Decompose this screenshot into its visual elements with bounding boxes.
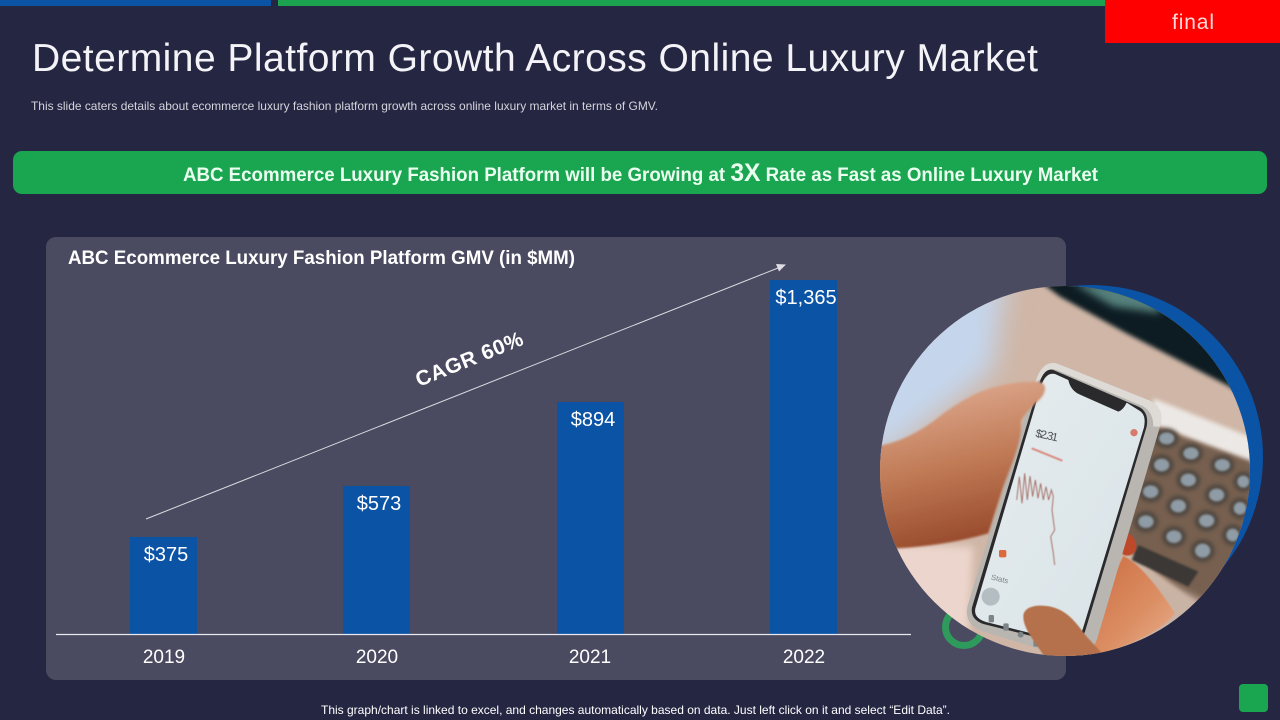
axis label: 2021: 2021 bbox=[569, 647, 611, 668]
tag: final bbox=[1105, 0, 1280, 43]
title: Determine Platform Growth Across Online Luxury Market bbox=[32, 37, 1038, 80]
right hand bbox=[1080, 534, 1175, 656]
phone screen bbox=[975, 374, 1145, 641]
label: CAGR: CAGR 60% bbox=[412, 327, 527, 392]
phone avatar bbox=[982, 588, 1000, 606]
banner bbox=[13, 151, 1267, 194]
phone bbox=[967, 363, 1161, 659]
phone chart marker bbox=[999, 550, 1006, 557]
banner text: ABC Ecommerce Luxury Fashion Platform will be Growing at 3X Rate as Fast as Online Luxury Market bbox=[183, 159, 1099, 187]
bar: 2020 bbox=[343, 486, 410, 634]
phone stats: Stats bbox=[990, 573, 1009, 586]
bar: 2019 bbox=[130, 537, 197, 634]
phone change bbox=[1032, 448, 1062, 461]
phone nav icons bbox=[989, 615, 1039, 647]
bar: 2022 bbox=[770, 280, 837, 634]
footnote: This graph/chart is linked to excel, and changes automatically based on data. Just left click on it and select “Edit Data”. bbox=[321, 703, 950, 717]
blue circle behind photo bbox=[919, 285, 1263, 629]
keyboard keys bbox=[1138, 432, 1249, 558]
chart heading: ABC Ecommerce Luxury Fashion Platform GMV (in $MM) bbox=[68, 248, 575, 269]
axis label: 2020: 2020 bbox=[356, 647, 398, 668]
bar: 2021 bbox=[557, 402, 624, 634]
subtitle: This slide caters details about ecommerce luxury fashion platform growth across online luxury market in terms of GMV. bbox=[31, 99, 658, 113]
decorative ring bbox=[946, 608, 982, 646]
top accent bar: green bbox=[278, 0, 1105, 6]
photo: hands holding smartphone bbox=[880, 286, 1250, 656]
keyboard key wells bbox=[1134, 428, 1253, 562]
green corner button bbox=[1239, 684, 1268, 712]
bar: 2019: $375 bbox=[144, 544, 188, 566]
phone bezel bbox=[972, 370, 1147, 644]
keyboard spacebar bbox=[1132, 545, 1198, 587]
axis label: 2022: 2022 bbox=[783, 647, 825, 668]
left hand with finger over phone bbox=[873, 382, 1045, 548]
bar: 2021: $894 bbox=[571, 409, 615, 431]
tag: final: final bbox=[1172, 11, 1214, 34]
thumb bbox=[1022, 604, 1102, 656]
phone casing bbox=[967, 363, 1161, 659]
phone indicator bbox=[1130, 429, 1138, 436]
phone price: $2.31 bbox=[1034, 428, 1059, 444]
axis label: 2019: 2019 bbox=[143, 647, 185, 668]
bar: 2020: $573 bbox=[357, 493, 401, 515]
phone line chart bbox=[1017, 473, 1055, 565]
top accent bar: blue bbox=[0, 0, 271, 6]
arrow: growth trend bbox=[146, 264, 786, 519]
panel: chart bbox=[46, 237, 1066, 680]
backdrop bbox=[880, 286, 1250, 656]
bar: 2022: $1,365 bbox=[775, 287, 837, 309]
